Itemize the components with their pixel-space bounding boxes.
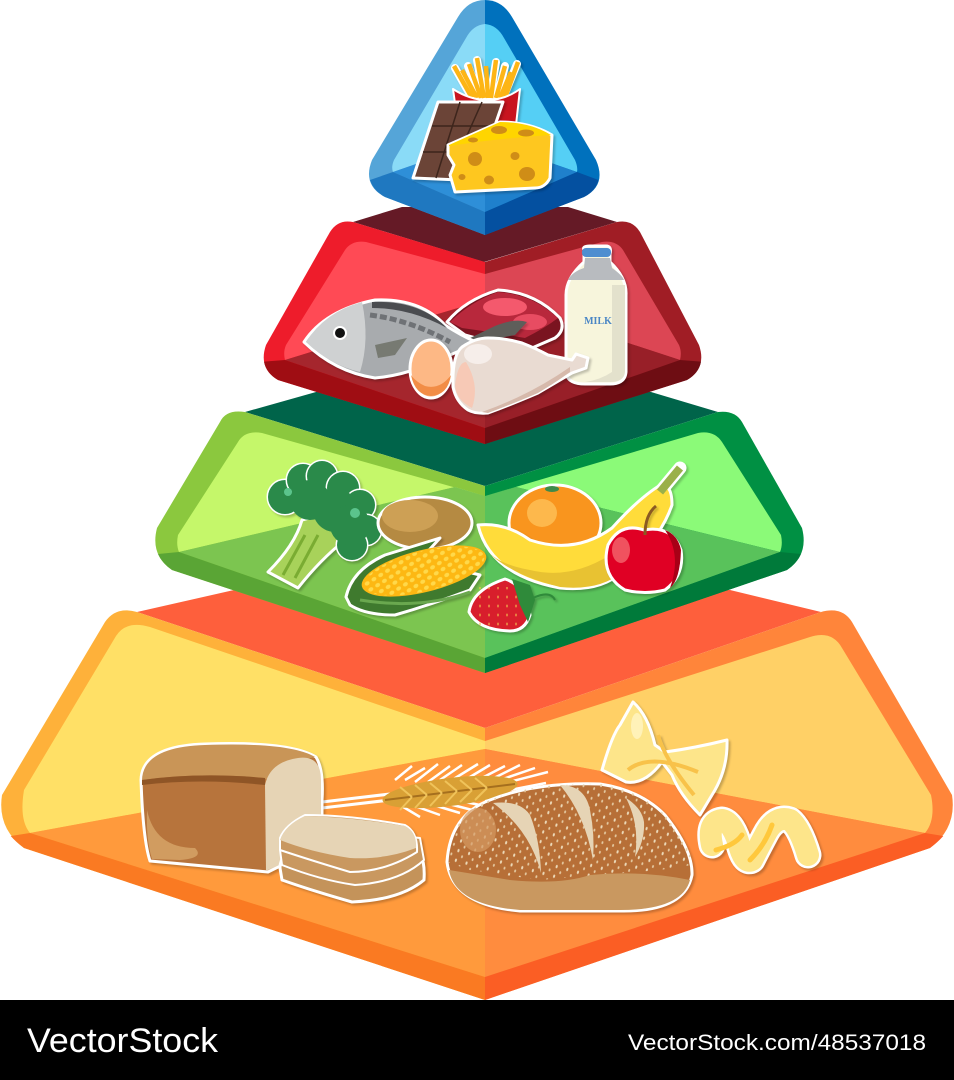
right rim [485, 221, 701, 444]
icon: bowtie pasta [602, 702, 727, 815]
right rim [485, 412, 804, 673]
right lower rim [485, 172, 598, 235]
left panel [22, 625, 485, 833]
icon: cheese wedge [448, 122, 552, 192]
left panel [177, 432, 485, 552]
icon: corn [346, 535, 491, 615]
left rim [155, 411, 485, 673]
watermark bar [0, 1000, 954, 1080]
left floor [393, 140, 485, 212]
left lower rim [264, 360, 485, 444]
right floor [485, 140, 577, 212]
right lower rim [485, 360, 701, 444]
icon: french fries [453, 58, 520, 125]
tier: sweets and fats [369, 0, 600, 235]
right lower rim [485, 552, 801, 673]
right floor [485, 300, 680, 428]
right floor [485, 749, 925, 977]
icon: strawberry [469, 579, 555, 631]
tier: grains base [1, 590, 953, 1000]
right floor [485, 487, 780, 658]
left panel [392, 24, 485, 172]
tier: fruit and vegetables [155, 392, 804, 673]
left lower rim [370, 172, 485, 235]
left lower rim [158, 552, 485, 673]
icon: round bread [447, 784, 692, 911]
watermark image id: VectorStock.com/48537018 [628, 1030, 926, 1055]
icon: egg [410, 340, 452, 398]
icon: sliced bread [280, 815, 424, 902]
back face [137, 590, 821, 728]
left lower rim [11, 833, 485, 1000]
icon: banana [478, 468, 680, 589]
right panel [485, 432, 782, 552]
watermark logo: VectorStock [27, 1022, 219, 1060]
left floor [30, 749, 485, 977]
icon: broccoli [268, 461, 381, 588]
right panel [485, 635, 933, 833]
icon: chocolate bar [413, 102, 503, 180]
icon: macaroni [711, 819, 808, 861]
back face [353, 207, 617, 262]
left rim [264, 221, 485, 444]
icon: fish [304, 300, 527, 378]
icon: wheat [322, 764, 548, 817]
icon: loaf of bread [141, 744, 322, 872]
icon: potato [378, 497, 472, 549]
icon: milk bottle [566, 246, 626, 384]
right panel [485, 24, 577, 172]
right lower rim [485, 833, 943, 1000]
icon: chicken leg [453, 338, 588, 413]
label: milk: MILK [584, 316, 612, 327]
icon: orange [509, 485, 601, 561]
left rim [369, 0, 485, 235]
left panel [284, 242, 485, 360]
right rim [485, 610, 953, 1000]
icon: apple [606, 506, 682, 592]
right panel [485, 242, 681, 360]
tier: protein and dairy [264, 207, 701, 444]
right rim [485, 0, 600, 235]
left floor [285, 300, 485, 428]
back face [245, 392, 718, 486]
left rim [1, 610, 485, 1000]
icon: steak [447, 290, 562, 351]
left floor [179, 487, 485, 658]
